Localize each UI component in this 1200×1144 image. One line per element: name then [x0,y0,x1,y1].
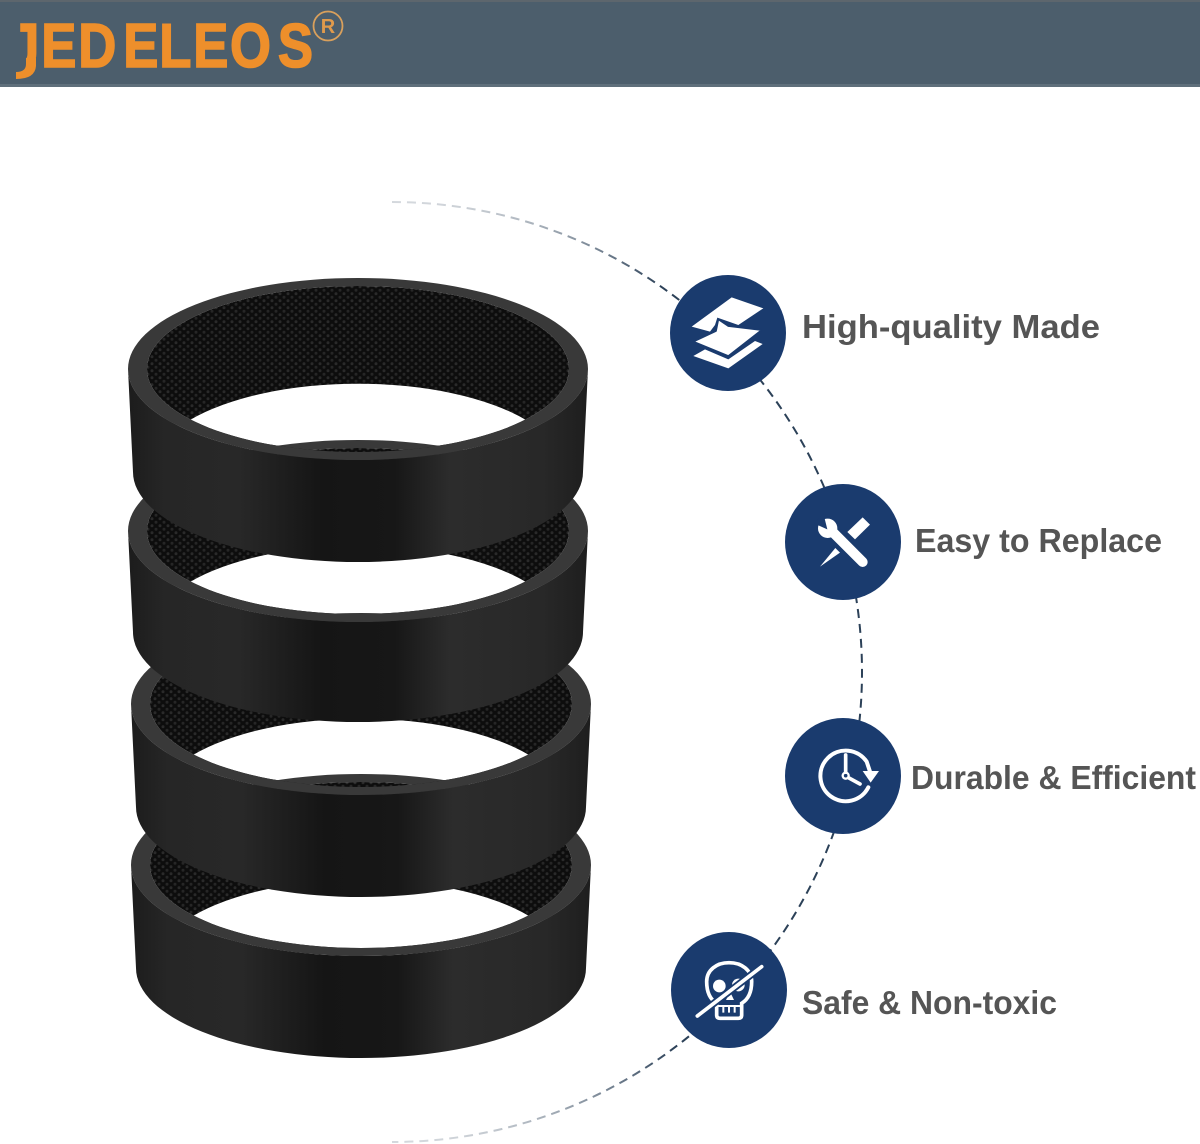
label: Safe & Non-toxic [802,984,1057,1021]
belt 4 [131,774,591,1058]
label: Durable & Efficient [911,759,1196,796]
dashed arc [392,202,862,1142]
icon: layered sheets [670,275,786,391]
label: Easy to Replace [915,522,1162,559]
feature: durable and efficient [785,718,1196,834]
header bar [0,0,1200,87]
belt 2 [128,440,588,722]
belt 3 [131,613,591,897]
icon: wrench and screwdriver [785,484,901,600]
icon: crossed-out skull [671,932,787,1048]
feature: easy to replace [785,484,1162,600]
label: High-quality Made [802,308,1100,345]
feature: safe and non-toxic [671,932,1057,1048]
product: stack of four belts [128,278,591,1058]
brand logo: JEDELEOS [10,12,313,81]
brand logo: R [321,16,336,38]
icon: clock with arrow [785,718,901,834]
feature: high-quality made [670,275,1100,391]
belt 1 [128,278,588,562]
